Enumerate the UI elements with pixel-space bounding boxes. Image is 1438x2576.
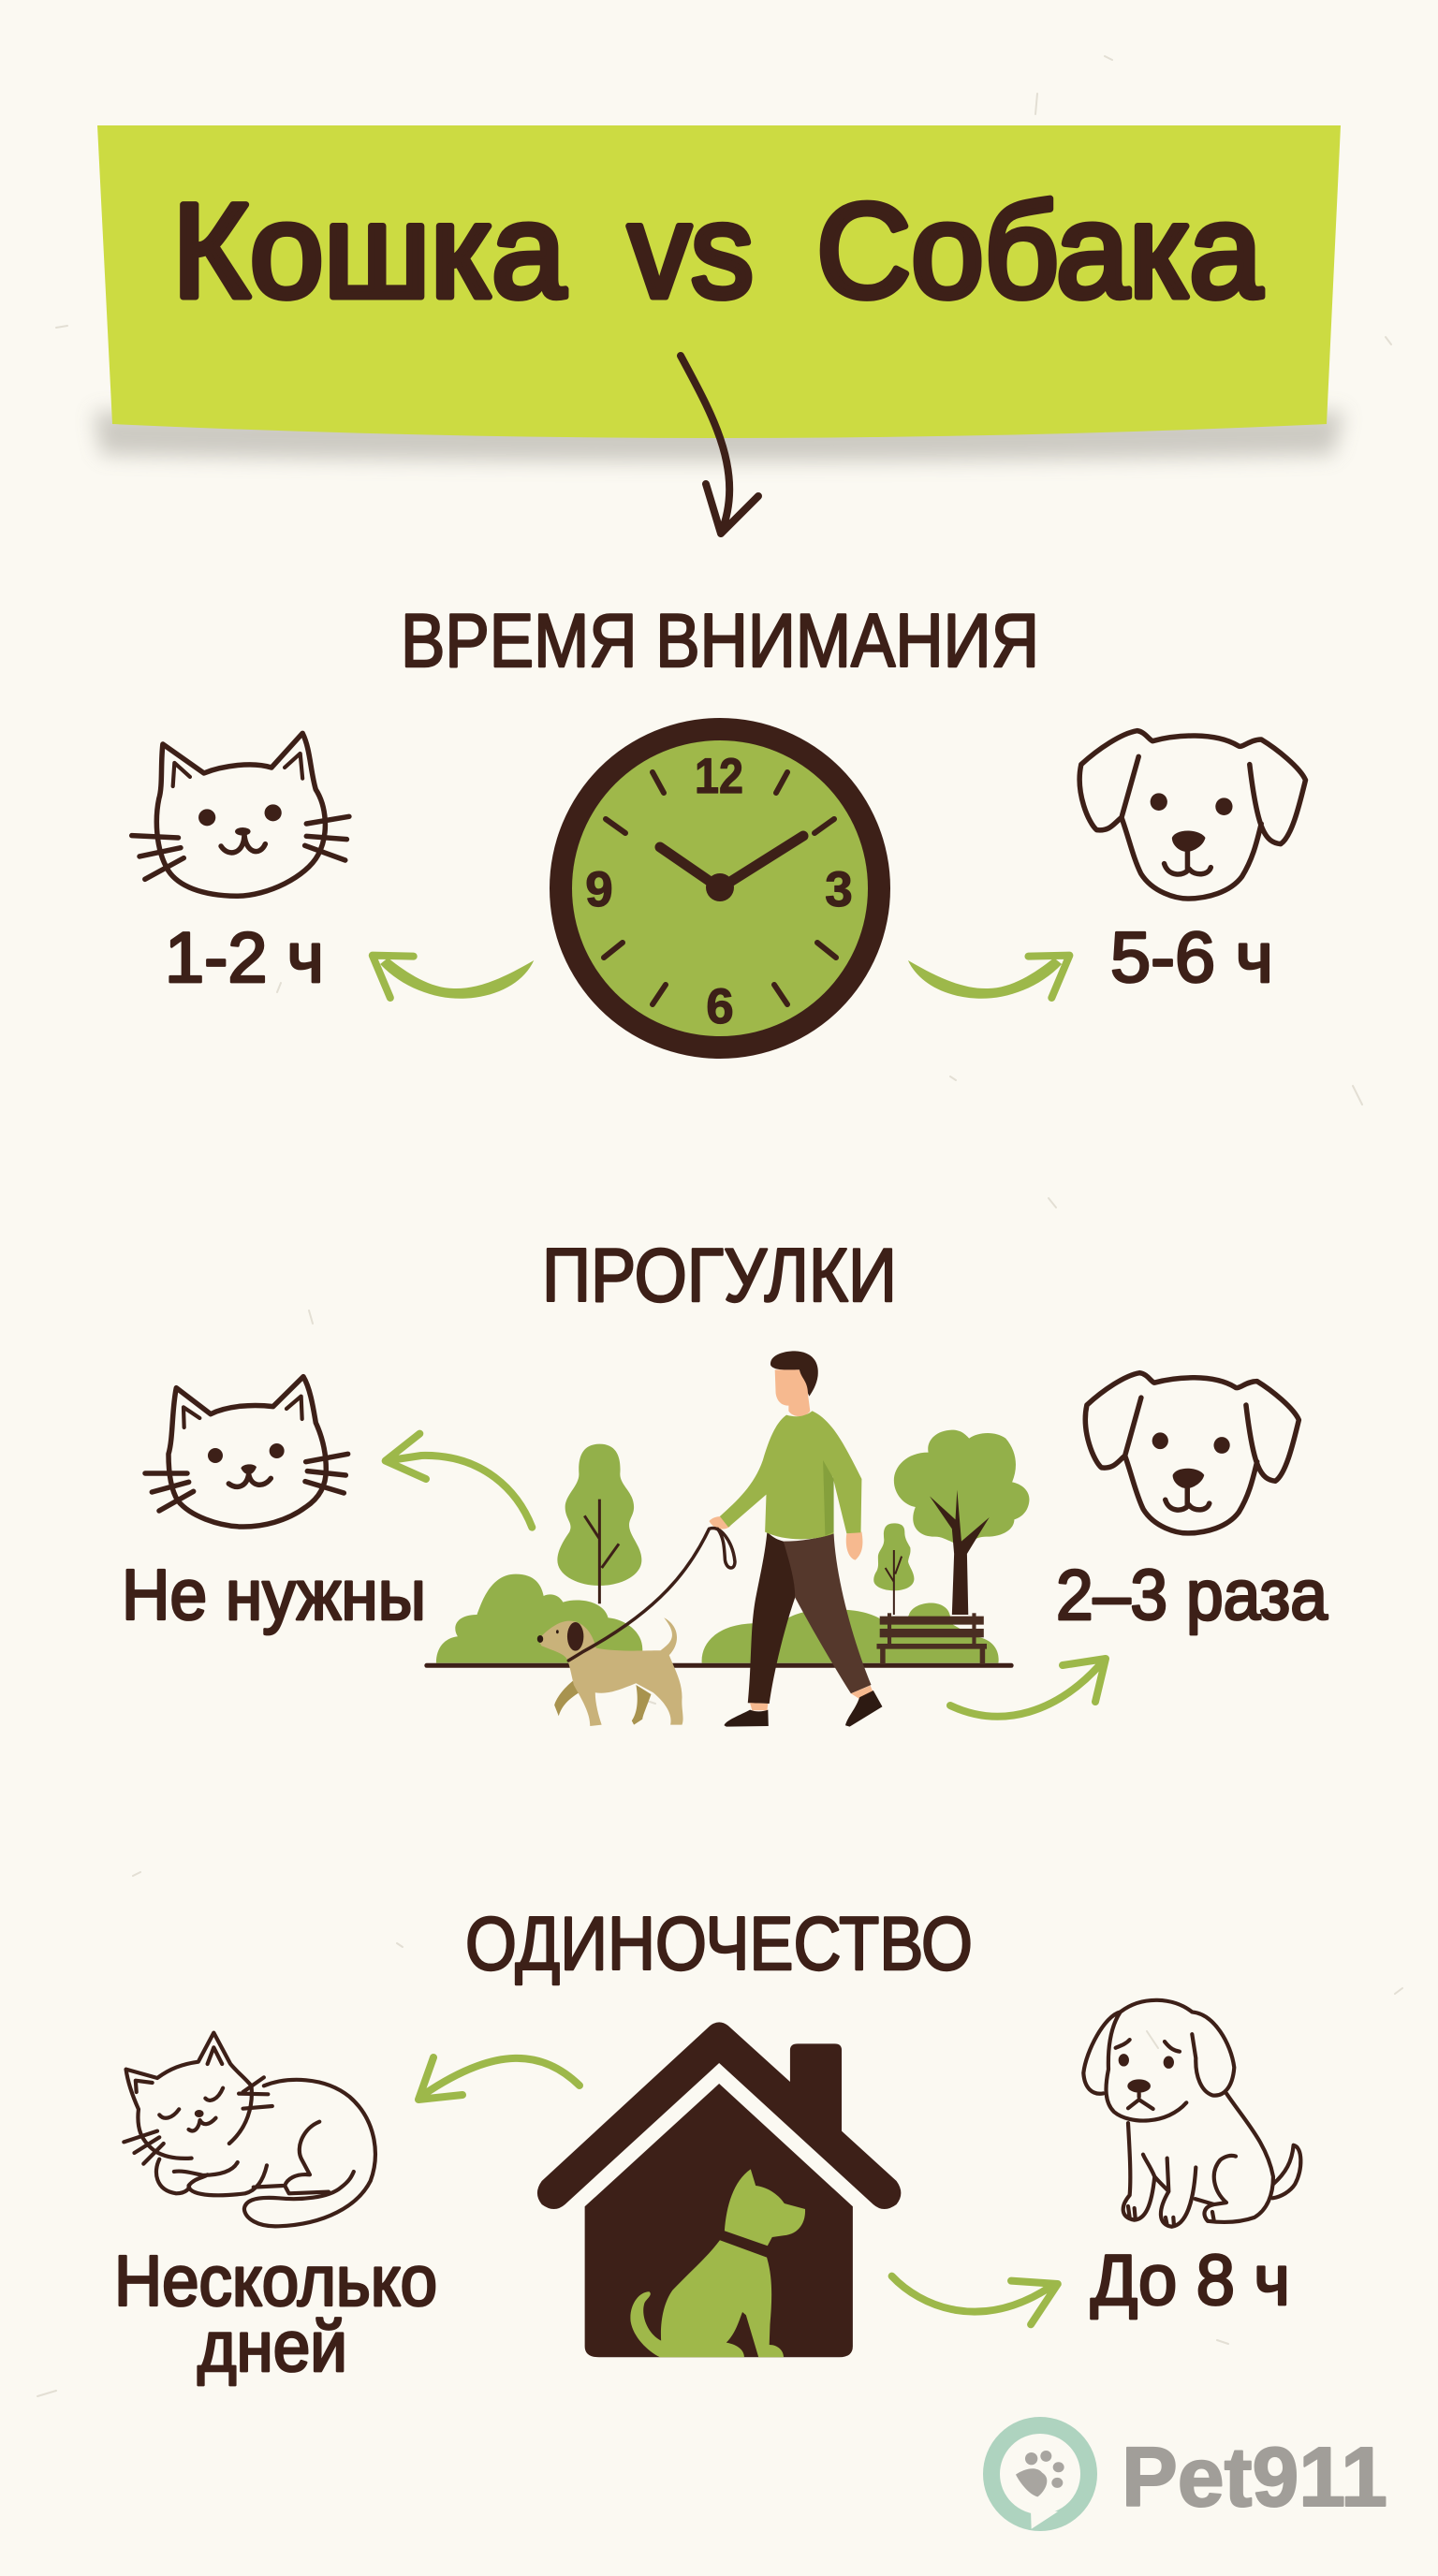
icon: dog head 1 xyxy=(1079,731,1305,899)
arrow: walks to cat xyxy=(386,1434,532,1528)
label: dog attention: 5-6 ч xyxy=(1110,918,1273,998)
heading: attention time: ВРЕМЯ ВНИМАНИЯ xyxy=(401,599,1039,683)
paw icon xyxy=(1016,2451,1064,2529)
arrow: home to dog xyxy=(892,2276,1058,2324)
icon: clock xyxy=(550,718,890,1059)
heading: loneliness: ОДИНОЧЕСТВО xyxy=(465,1902,973,1986)
title text: Собака xyxy=(816,177,1262,326)
icon: clock: 3 xyxy=(825,862,853,917)
big tree xyxy=(894,1430,1029,1544)
small tree xyxy=(873,1523,914,1590)
logo wordmark: Pet911 xyxy=(1122,2431,1387,2525)
icon: cat head 1 xyxy=(132,733,349,896)
icon: clock: 6 xyxy=(706,979,734,1034)
label: dog walks: 2–3 раза xyxy=(1056,1556,1328,1635)
icon: dog head 2 xyxy=(1085,1373,1299,1533)
arrow: clock to cat xyxy=(373,956,534,999)
title text: vs xyxy=(628,177,754,326)
arrow: home to cat xyxy=(418,2057,580,2100)
arrow: clock to dog xyxy=(908,956,1069,999)
icon: park scene with person and dog xyxy=(427,1351,1029,1727)
title text xyxy=(172,177,1262,326)
label: cat attention: 1-2 ч xyxy=(165,918,324,998)
label: dog loneliness: До 8 ч xyxy=(1091,2241,1290,2320)
arrow: walks to dog xyxy=(950,1659,1106,1717)
tall tree xyxy=(557,1444,641,1586)
logo: Pet911 xyxy=(991,2425,1387,2529)
label: cat loneliness xyxy=(114,2242,437,2387)
label: cat loneliness: Несколько xyxy=(114,2242,437,2321)
bushes xyxy=(436,1574,642,1663)
title banner xyxy=(94,125,1344,461)
icon: cat head 2 xyxy=(145,1377,348,1527)
arrow: title down xyxy=(681,356,758,534)
heading: walks: ПРОГУЛКИ xyxy=(542,1234,897,1318)
icon: clock: 12 xyxy=(695,749,743,804)
icon: clock: 9 xyxy=(585,862,613,917)
walking dog xyxy=(537,1617,683,1726)
person xyxy=(709,1351,882,1727)
icon: house with dog xyxy=(537,2022,901,2357)
label: cat walks: Не нужны xyxy=(122,1556,426,1635)
bench xyxy=(876,1613,987,1664)
icon: sad puppy xyxy=(1083,2000,1300,2227)
ground line xyxy=(427,1663,1011,1668)
title text: Кошка xyxy=(172,177,565,326)
icon: sleeping cat xyxy=(124,2033,375,2226)
label: cat loneliness: дней xyxy=(198,2307,347,2387)
leash xyxy=(568,1528,735,1661)
